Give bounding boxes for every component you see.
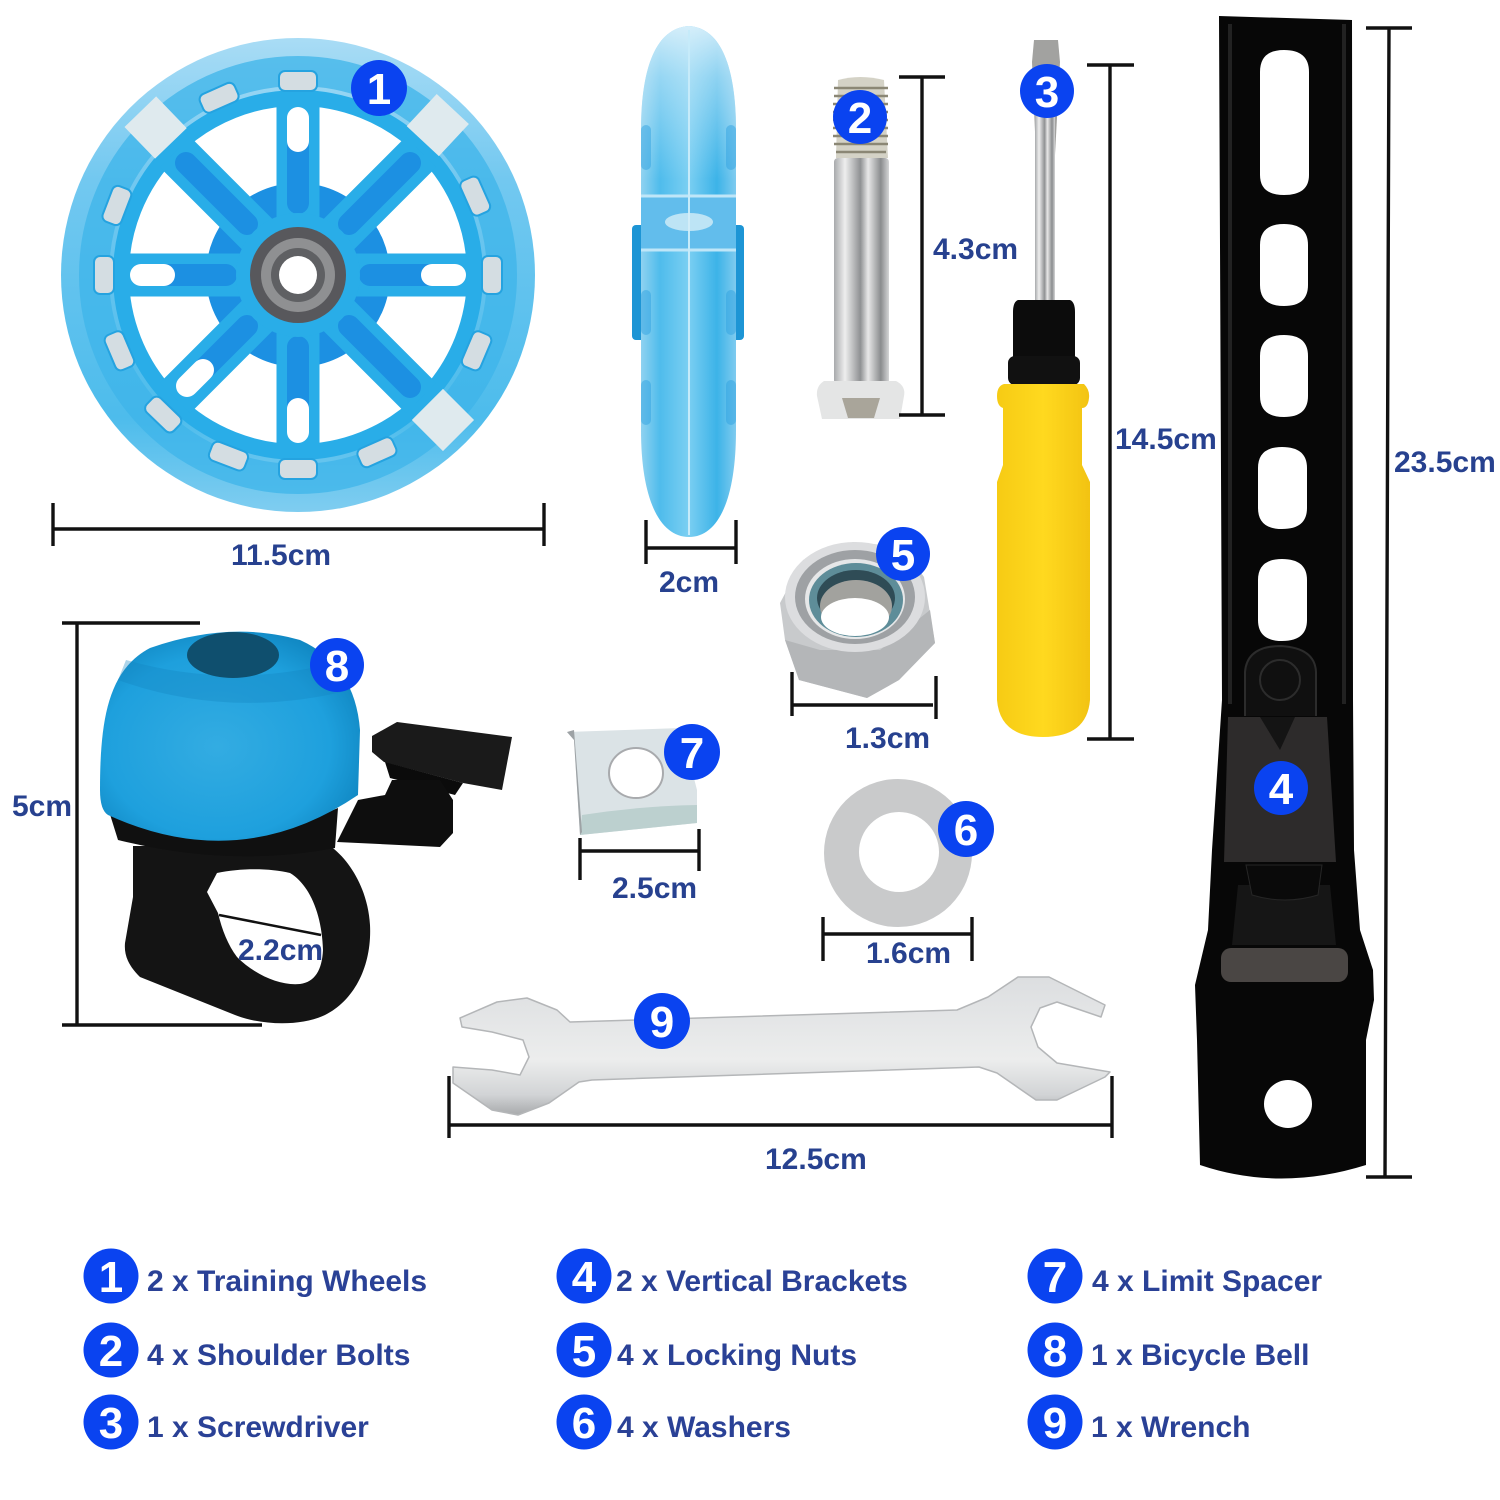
- legend item 3: 3: [99, 1399, 123, 1448]
- legend item 2: [84, 1322, 410, 1378]
- bracket dimension: [1366, 28, 1496, 1177]
- bell clamp dimension: [219, 915, 323, 967]
- limit spacer: [567, 728, 697, 835]
- number badge 6: 6: [954, 806, 978, 855]
- nut dimension: 1.3cm: [845, 722, 930, 755]
- screwdriver dimension: 14.5cm: [1115, 423, 1217, 456]
- legend item 8: 8: [1043, 1327, 1067, 1376]
- number badge 6: [938, 801, 994, 857]
- legend item 9: 1 x Wrench: [1091, 1411, 1251, 1444]
- wrench: [453, 977, 1110, 1115]
- bolt dimension: [899, 77, 1018, 415]
- nut dimension: [792, 672, 936, 755]
- bracket dimension: 23.5cm: [1394, 446, 1496, 479]
- locking nut: [780, 542, 935, 698]
- wrench dimension: [449, 1076, 1112, 1176]
- bell clamp dimension: 2.2cm: [238, 934, 323, 967]
- number badge 8: 8: [325, 642, 349, 691]
- number badge 9: [634, 993, 690, 1049]
- legend: [84, 1248, 1322, 1450]
- legend item 1: [84, 1248, 427, 1304]
- bolt dimension: 4.3cm: [933, 233, 1018, 266]
- wheel side view: [632, 26, 744, 537]
- number badge 3: [1020, 64, 1074, 118]
- washer dimension: [823, 917, 972, 970]
- spacer dimension: [580, 829, 699, 905]
- washer: [824, 779, 972, 927]
- legend item 7: [1028, 1248, 1322, 1304]
- number badge 4: 4: [1269, 765, 1294, 814]
- legend item 5: 4 x Locking Nuts: [617, 1339, 857, 1372]
- vertical bracket: [1195, 16, 1374, 1178]
- legend item 2: 4 x Shoulder Bolts: [147, 1339, 410, 1372]
- legend item 6: [556, 1394, 791, 1450]
- legend item 5: [556, 1322, 857, 1378]
- wheel diameter dimension: 11.5cm: [231, 539, 331, 572]
- number badge 5: [876, 527, 930, 581]
- legend item 9: 9: [1043, 1399, 1067, 1448]
- number badge 1: [351, 60, 407, 116]
- wheel diameter dimension: [53, 503, 544, 572]
- number badge 3: 3: [1035, 68, 1059, 117]
- legend item 3: 1 x Screwdriver: [147, 1411, 369, 1444]
- legend item 7: 7: [1043, 1253, 1067, 1302]
- number badge 8: [310, 638, 364, 692]
- number badge 2: 2: [848, 94, 872, 143]
- legend item 8: 1 x Bicycle Bell: [1091, 1339, 1309, 1372]
- legend item 7: 4 x Limit Spacer: [1092, 1265, 1322, 1298]
- number badge 1: 1: [367, 65, 391, 114]
- wrench dimension: 12.5cm: [765, 1143, 867, 1176]
- number badge 7: 7: [680, 729, 704, 778]
- number badge 2: [833, 90, 887, 144]
- spacer dimension: 2.5cm: [612, 872, 697, 905]
- legend item 4: 4: [572, 1253, 597, 1302]
- washer dimension: 1.6cm: [866, 937, 951, 970]
- bicycle bell: [100, 632, 512, 1023]
- legend item 1: 2 x Training Wheels: [147, 1265, 427, 1298]
- shoulder bolt: [817, 77, 904, 419]
- legend item 6: 4 x Washers: [617, 1411, 791, 1444]
- number badge 4: [1254, 761, 1308, 815]
- legend item 9: [1028, 1394, 1251, 1450]
- legend item 8: [1028, 1322, 1309, 1378]
- wheel width dimension: 2cm: [659, 566, 719, 599]
- wheel width dimension: [646, 520, 736, 599]
- number badge 5: 5: [891, 531, 915, 580]
- wheel front view: [61, 38, 535, 512]
- legend item 2: 2: [99, 1327, 123, 1376]
- legend item 6: 6: [572, 1399, 596, 1448]
- bell height dimension: 5cm: [12, 790, 72, 823]
- screwdriver dimension: [1087, 65, 1217, 739]
- legend item 1: 1: [99, 1253, 123, 1302]
- legend item 4: 2 x Vertical Brackets: [616, 1265, 908, 1298]
- bell height dimension: [12, 623, 262, 1025]
- legend item 4: [556, 1248, 908, 1304]
- legend item 5: 5: [572, 1327, 596, 1376]
- number badge 9: 9: [650, 998, 674, 1047]
- legend item 3: [84, 1394, 369, 1450]
- screwdriver: [997, 40, 1090, 737]
- number badge 7: [664, 724, 720, 780]
